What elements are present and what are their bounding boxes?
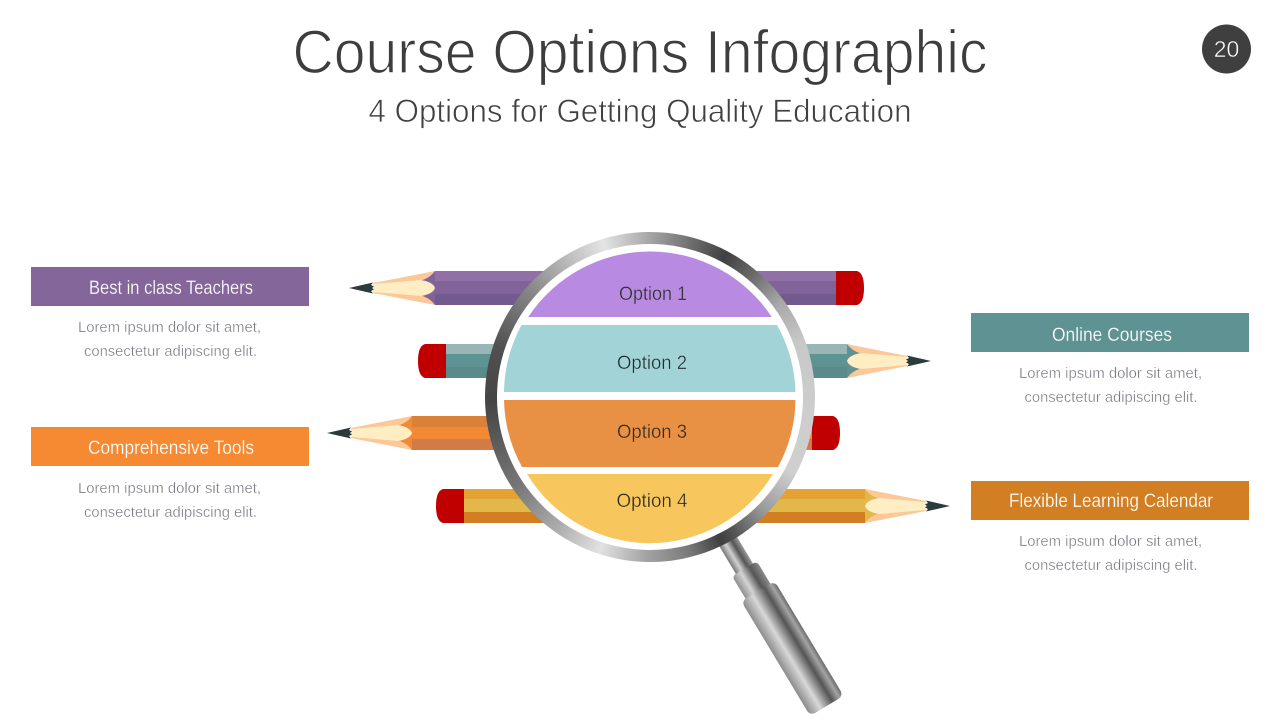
- option 3 band: [504, 400, 796, 467]
- panel: comprehensive tools: consectetur adipiscing elit.: [84, 504, 257, 521]
- icon: teal pencil: [418, 344, 931, 378]
- option 2 band: Option 2: [617, 353, 687, 374]
- panel: online courses: [971, 313, 1249, 406]
- panel: best in class teachers: Best in class Teachers: [89, 278, 253, 299]
- title: Course Options Infographic: [292, 18, 988, 86]
- panel: best in class teachers: Lorem ipsum dolor sit amet,: [78, 319, 261, 336]
- panel: comprehensive tools: [31, 427, 309, 521]
- option 1 band: Option 1: [619, 284, 687, 305]
- panel: online courses: Lorem ipsum dolor sit amet,: [1019, 365, 1202, 382]
- icon: purple pencil: [349, 271, 864, 305]
- page number badge: 20: [1214, 36, 1239, 62]
- option 4 band: Option 4: [616, 491, 688, 512]
- page number badge: [1202, 24, 1251, 74]
- panel: best in class teachers: [31, 267, 309, 360]
- icon: magnifying glass ring: [485, 232, 815, 562]
- panel: comprehensive tools: Comprehensive Tools: [88, 438, 254, 459]
- option 4 band: [527, 474, 773, 543]
- panel: flexible learning calendar: Flexible Learning Calendar: [1009, 491, 1214, 512]
- subtitle: 4 Options for Getting Quality Education: [368, 93, 912, 129]
- panel: comprehensive tools: Lorem ipsum dolor sit amet,: [78, 480, 261, 497]
- icon: orange pencil: [327, 416, 840, 450]
- panel: best in class teachers: consectetur adipiscing elit.: [84, 343, 257, 360]
- icon: magnifying glass handle: [705, 521, 844, 716]
- panel: flexible learning calendar: consectetur adipiscing elit.: [1024, 557, 1198, 574]
- option 2 band: [504, 325, 796, 392]
- panel: flexible learning calendar: Lorem ipsum dolor sit amet,: [1019, 533, 1202, 550]
- option 1 band: [528, 252, 772, 317]
- option 3 band: Option 3: [617, 422, 687, 443]
- icon: yellow pencil: [436, 489, 950, 523]
- panel: flexible learning calendar: [971, 481, 1249, 574]
- panel: online courses: consectetur adipiscing elit.: [1024, 389, 1198, 406]
- panel: online courses: Online Courses: [1052, 325, 1172, 346]
